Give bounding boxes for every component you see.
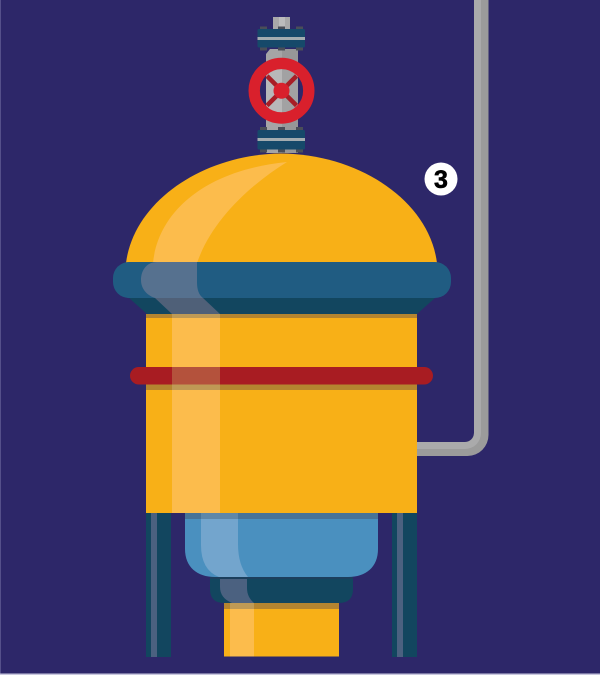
handwheel <box>254 63 309 118</box>
blue bowl <box>185 513 378 577</box>
shadow under collar <box>146 314 417 318</box>
vessel body <box>146 314 417 513</box>
valve stem top <box>273 17 290 30</box>
body highlight <box>172 314 220 513</box>
number badge: 3: 3 <box>434 166 448 194</box>
red band <box>130 367 433 384</box>
valve assembly <box>254 17 309 153</box>
collar flange <box>113 262 451 314</box>
top flange <box>258 26 305 50</box>
shadow under red band <box>146 384 417 390</box>
dome highlight <box>153 162 287 263</box>
bottom flange <box>258 127 305 152</box>
legs <box>146 513 417 657</box>
dark collar below bowl <box>210 577 353 603</box>
collar highlight <box>141 262 203 298</box>
number badge: 3 <box>424 162 458 196</box>
pipe <box>417 0 488 456</box>
dome <box>126 154 437 263</box>
lower yellow outlet <box>224 603 339 656</box>
valve body <box>266 49 298 153</box>
